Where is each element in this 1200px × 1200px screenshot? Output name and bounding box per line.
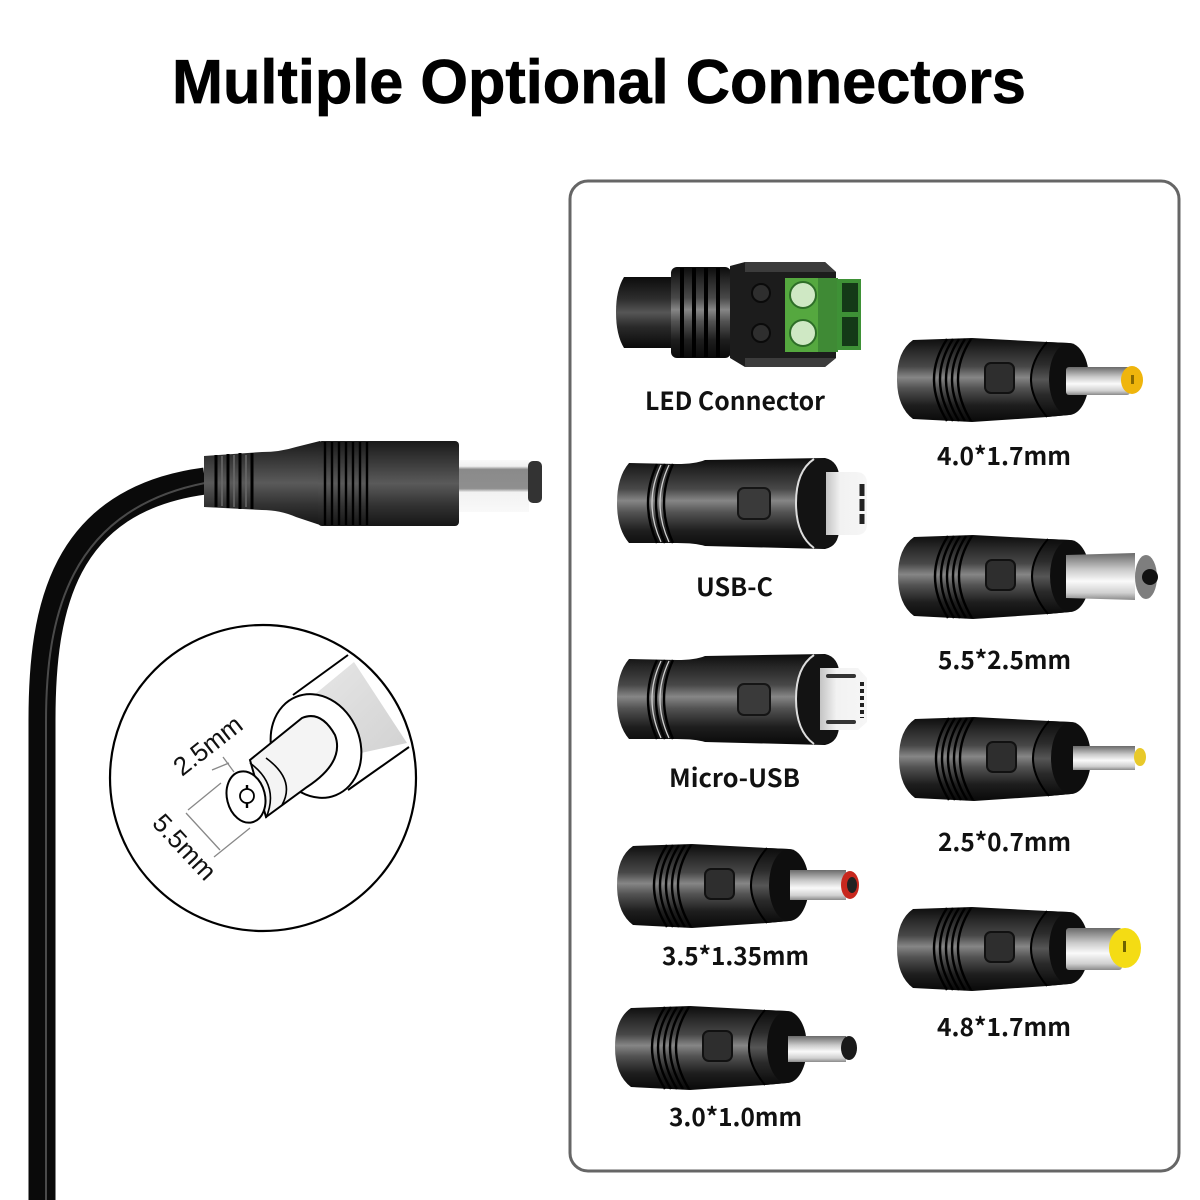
label: 5.5*2.5mm: 5.5*2.5mm [938, 641, 1071, 677]
label: Micro-USB: Micro-USB [669, 759, 800, 795]
connector: 4.0*1.7mm [897, 338, 1143, 422]
label: 4.8*1.7mm: 4.8*1.7mm [937, 1008, 1071, 1044]
pin drawing [221, 716, 337, 827]
label: USB-C: USB-C [696, 568, 773, 604]
sleeve [255, 655, 409, 812]
label: LED Connector: LED Connector [645, 382, 825, 418]
connector: 5.5*2.5mm [898, 535, 1158, 619]
connector: 4.8*1.7mm [897, 907, 1141, 991]
connector: 3.5*1.35mm [617, 844, 859, 928]
dimension lines [186, 757, 250, 857]
plug strain relief [204, 441, 320, 525]
connector: USB-C [617, 458, 867, 549]
title: Multiple Optional Connectors [172, 48, 1026, 117]
plug pin [459, 460, 542, 512]
label: 3.5*1.35mm: 3.5*1.35mm [662, 937, 809, 973]
label: 2.5*0.7mm: 2.5*0.7mm [938, 823, 1071, 859]
label: 3.0*1.0mm: 3.0*1.0mm [669, 1098, 802, 1134]
dimension label 2.5mm: 2.5mm [167, 709, 248, 782]
label: 4.0*1.7mm: 4.0*1.7mm [937, 437, 1071, 473]
dimension label 5.5mm: 5.5mm [147, 808, 223, 886]
plug barrel [318, 441, 459, 526]
panel: connectors [570, 181, 1179, 1171]
connector: 3.0*1.0mm [615, 1006, 857, 1090]
connector: 2.5*0.7mm [899, 717, 1146, 801]
cable [42, 481, 205, 1200]
connector: LED terminal [616, 262, 861, 367]
callout: pin dimensions circle [110, 625, 416, 931]
connector: Micro-USB [617, 654, 867, 745]
main cable and plug [42, 441, 542, 1200]
